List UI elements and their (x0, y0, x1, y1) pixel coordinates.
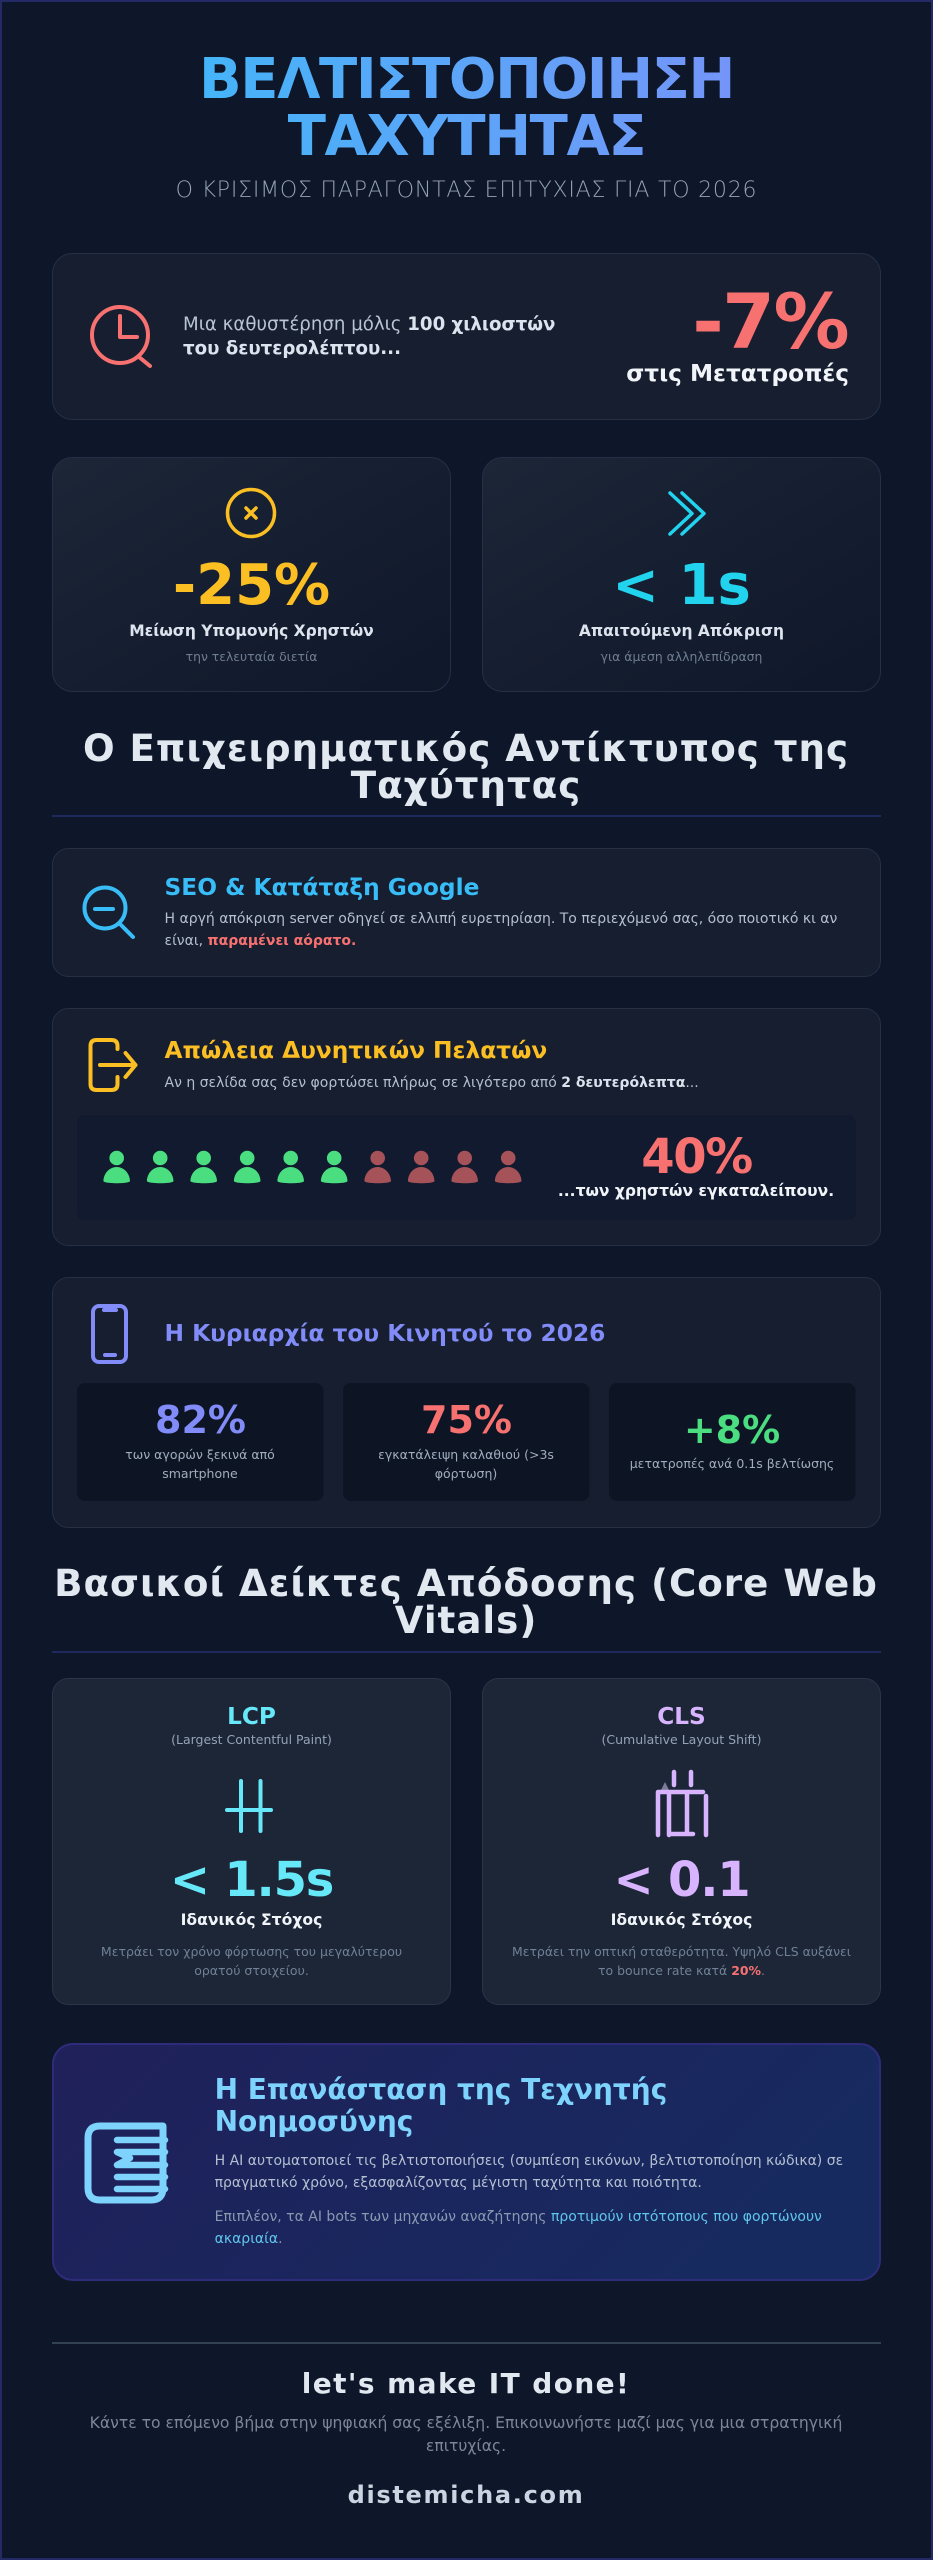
stat box: +8%: +8% (684, 1408, 780, 1452)
panel: patience stat (52, 458, 450, 692)
panel: response stat (482, 458, 880, 692)
metric: 40%: 40% (641, 1129, 752, 1185)
LCP description: ορατού στοιχείου. (194, 1963, 309, 1978)
label: Απαιτούμενη Απόκριση (579, 622, 784, 640)
icon: clock (92, 307, 150, 366)
icon: chevrons (670, 493, 704, 534)
panel: conversions delay (52, 254, 880, 420)
delay text (183, 314, 555, 359)
panel: lost customers (52, 1008, 880, 1246)
AI paragraph 1: Η AI αυτοματοποιεί τις βελτιστοποιήσεις (συμπίεση εικόνων, βελτιστοποίηση κώδικα) σε (215, 2153, 843, 2169)
icon: CLS layout (658, 1772, 706, 1835)
AI paragraph 2 (215, 2209, 822, 2247)
AI title: Η Επανάσταση της Τεχνητής (215, 2073, 667, 2106)
panel: AI revolution (53, 2044, 880, 2280)
metric: -7%: -7% (692, 277, 848, 366)
panel: LCP (52, 1678, 450, 2004)
stat box: 75% (343, 1383, 590, 1501)
panel: abandonment (77, 1115, 856, 1220)
AI paragraph 2: Επιπλέον, τα AI bots των μηχανών αναζήτησης προτιμούν ιστότοπους που φορτώνουν (215, 2209, 822, 2225)
AI title (215, 2073, 667, 2138)
panel: CLS (482, 1678, 880, 2004)
footer: call to action: επιτυχίας. (426, 2437, 506, 2455)
SEO body: Η αργή απόκριση server οδηγεί σε ελλιπή ευρετηρίαση. Το περιεχόμενό σας, όσο ποιοτικό κι αν (164, 911, 838, 927)
icon: magnifier (84, 888, 133, 937)
label: Μείωση Υπομονής Χρηστών (129, 622, 374, 640)
icon: exit (90, 1040, 136, 1090)
AI paragraph 1 (215, 2153, 843, 2191)
metric: -7% (626, 277, 849, 387)
metric: 40% (558, 1129, 834, 1200)
heading: business impact (52, 726, 881, 817)
note: την τελευταία διετία (186, 649, 317, 664)
stat box: 82%: smartphone (162, 1466, 238, 1481)
metric: < 1.5s: < 1.5s (170, 1852, 333, 1908)
title: ΒΕΛΤΙΣΤΟΠΟΙΗΣΗ (199, 47, 734, 112)
AI paragraph 1: πραγματικό χρόνο, εξασφαλίζοντας μέγιστη ταχύτητα και ποιότητα. (215, 2175, 702, 2191)
SEO title: SEO & Κατάταξη Google (164, 874, 479, 901)
title (199, 47, 734, 169)
metric: 40%: ...των χρηστών εγκαταλείπουν. (558, 1182, 834, 1200)
heading: core web vitals (52, 1561, 881, 1653)
LCP description: Μετράει τον χρόνο φόρτωσης του μεγαλύτερου (101, 1944, 402, 1959)
stat box: +8%: μετατροπές ανά 0.1s βελτίωσης (630, 1456, 834, 1471)
metric: < 0.1: < 0.1 (614, 1852, 749, 1908)
CLS title: CLS (657, 1703, 706, 1730)
icon: x circle (228, 490, 274, 536)
CLS description: το bounce rate κατά 20%. (598, 1963, 765, 1978)
footer: call to action: let's make IT done! (302, 2367, 630, 2400)
target label: Ιδανικός Στόχος (611, 1911, 752, 1929)
icon: LCP bars (227, 1781, 271, 1831)
CLS description: Μετράει την οπτική σταθερότητα. Υψηλό CLS αυξάνει (512, 1944, 851, 1959)
metric: -25%: -25% (173, 553, 330, 618)
CLS description (512, 1944, 851, 1978)
stat box: 75%: εγκατάλειψη καλαθιού (>3s (378, 1447, 554, 1462)
LCP title: LCP (227, 1703, 276, 1730)
mobile title: Η Κυριαρχία του Κινητού το 2026 (164, 1320, 605, 1347)
AI title: Νοημοσύνης (215, 2105, 413, 2138)
footer: call to action: Κάντε το επόμενο βήμα στην ψηφιακή σας εξέλιξη. Επικοινωνήστε μαζί μας για μια στρατηγική (90, 2414, 842, 2432)
CLS title: (Cumulative Layout Shift) (602, 1732, 761, 1747)
stat box: 75%: 75% (421, 1398, 512, 1442)
LCP description (101, 1944, 402, 1978)
CLS title (602, 1703, 761, 1747)
metric: -7%: στις Μετατροπές (626, 360, 849, 387)
title: ΤΑΧΥΤΗΤΑΣ (288, 104, 645, 169)
subtitle: Ο ΚΡΙΣΙΜΟΣ ΠΑΡΑΓΟΝΤΑΣ ΕΠΙΤΥΧΙΑΣ ΓΙΑ ΤΟ 2026 (176, 178, 757, 203)
heading: business impact: Ο Επιχειρηματικός Αντίκτυπος της (83, 726, 849, 770)
target label: Ιδανικός Στόχος (181, 1911, 322, 1929)
lost customers body: Αν η σελίδα σας δεν φορτώσει πλήρως σε λιγότερο από 2 δευτερόλεπτα... (164, 1075, 699, 1091)
pictogram: 10 users (103, 1151, 522, 1183)
heading: business impact: Ταχύτητας (351, 763, 581, 807)
lost customers title: Απώλεια Δυνητικών Πελατών (164, 1037, 547, 1064)
LCP title (171, 1703, 332, 1747)
icon: AI document (88, 2126, 165, 2200)
heading: core web vitals: Βασικοί Δείκτες Απόδοσης (Core Web (54, 1561, 878, 1605)
heading: core web vitals: Vitals) (395, 1598, 537, 1642)
panel: mobile dominance (52, 1278, 880, 1528)
footer: website: distemicha.com (348, 2481, 584, 2509)
delay text: Μια καθυστέρηση μόλις 100 χιλιοστών (183, 314, 555, 335)
stat box: 82%: 82% (155, 1398, 246, 1442)
note: για άμεση αλληλεπίδραση (601, 649, 762, 664)
stat box: 82% (77, 1383, 324, 1501)
delay text: του δευτερολέπτου... (183, 338, 401, 359)
AI paragraph 2: ακαριαία. (215, 2231, 283, 2247)
metric: < 1s: < 1s (612, 553, 751, 618)
stat box: +8% (609, 1383, 856, 1501)
stat box: 82%: των αγορών ξεκινά από (125, 1447, 275, 1462)
SEO body (164, 911, 838, 949)
footer: call to action (90, 2367, 842, 2455)
panel: SEO (52, 848, 880, 976)
SEO body: είναι, παραμένει αόρατο. (164, 933, 356, 949)
stat box: 75%: φόρτωση) (435, 1466, 497, 1481)
LCP title: (Largest Contentful Paint) (171, 1732, 332, 1747)
icon: phone (93, 1306, 126, 1362)
